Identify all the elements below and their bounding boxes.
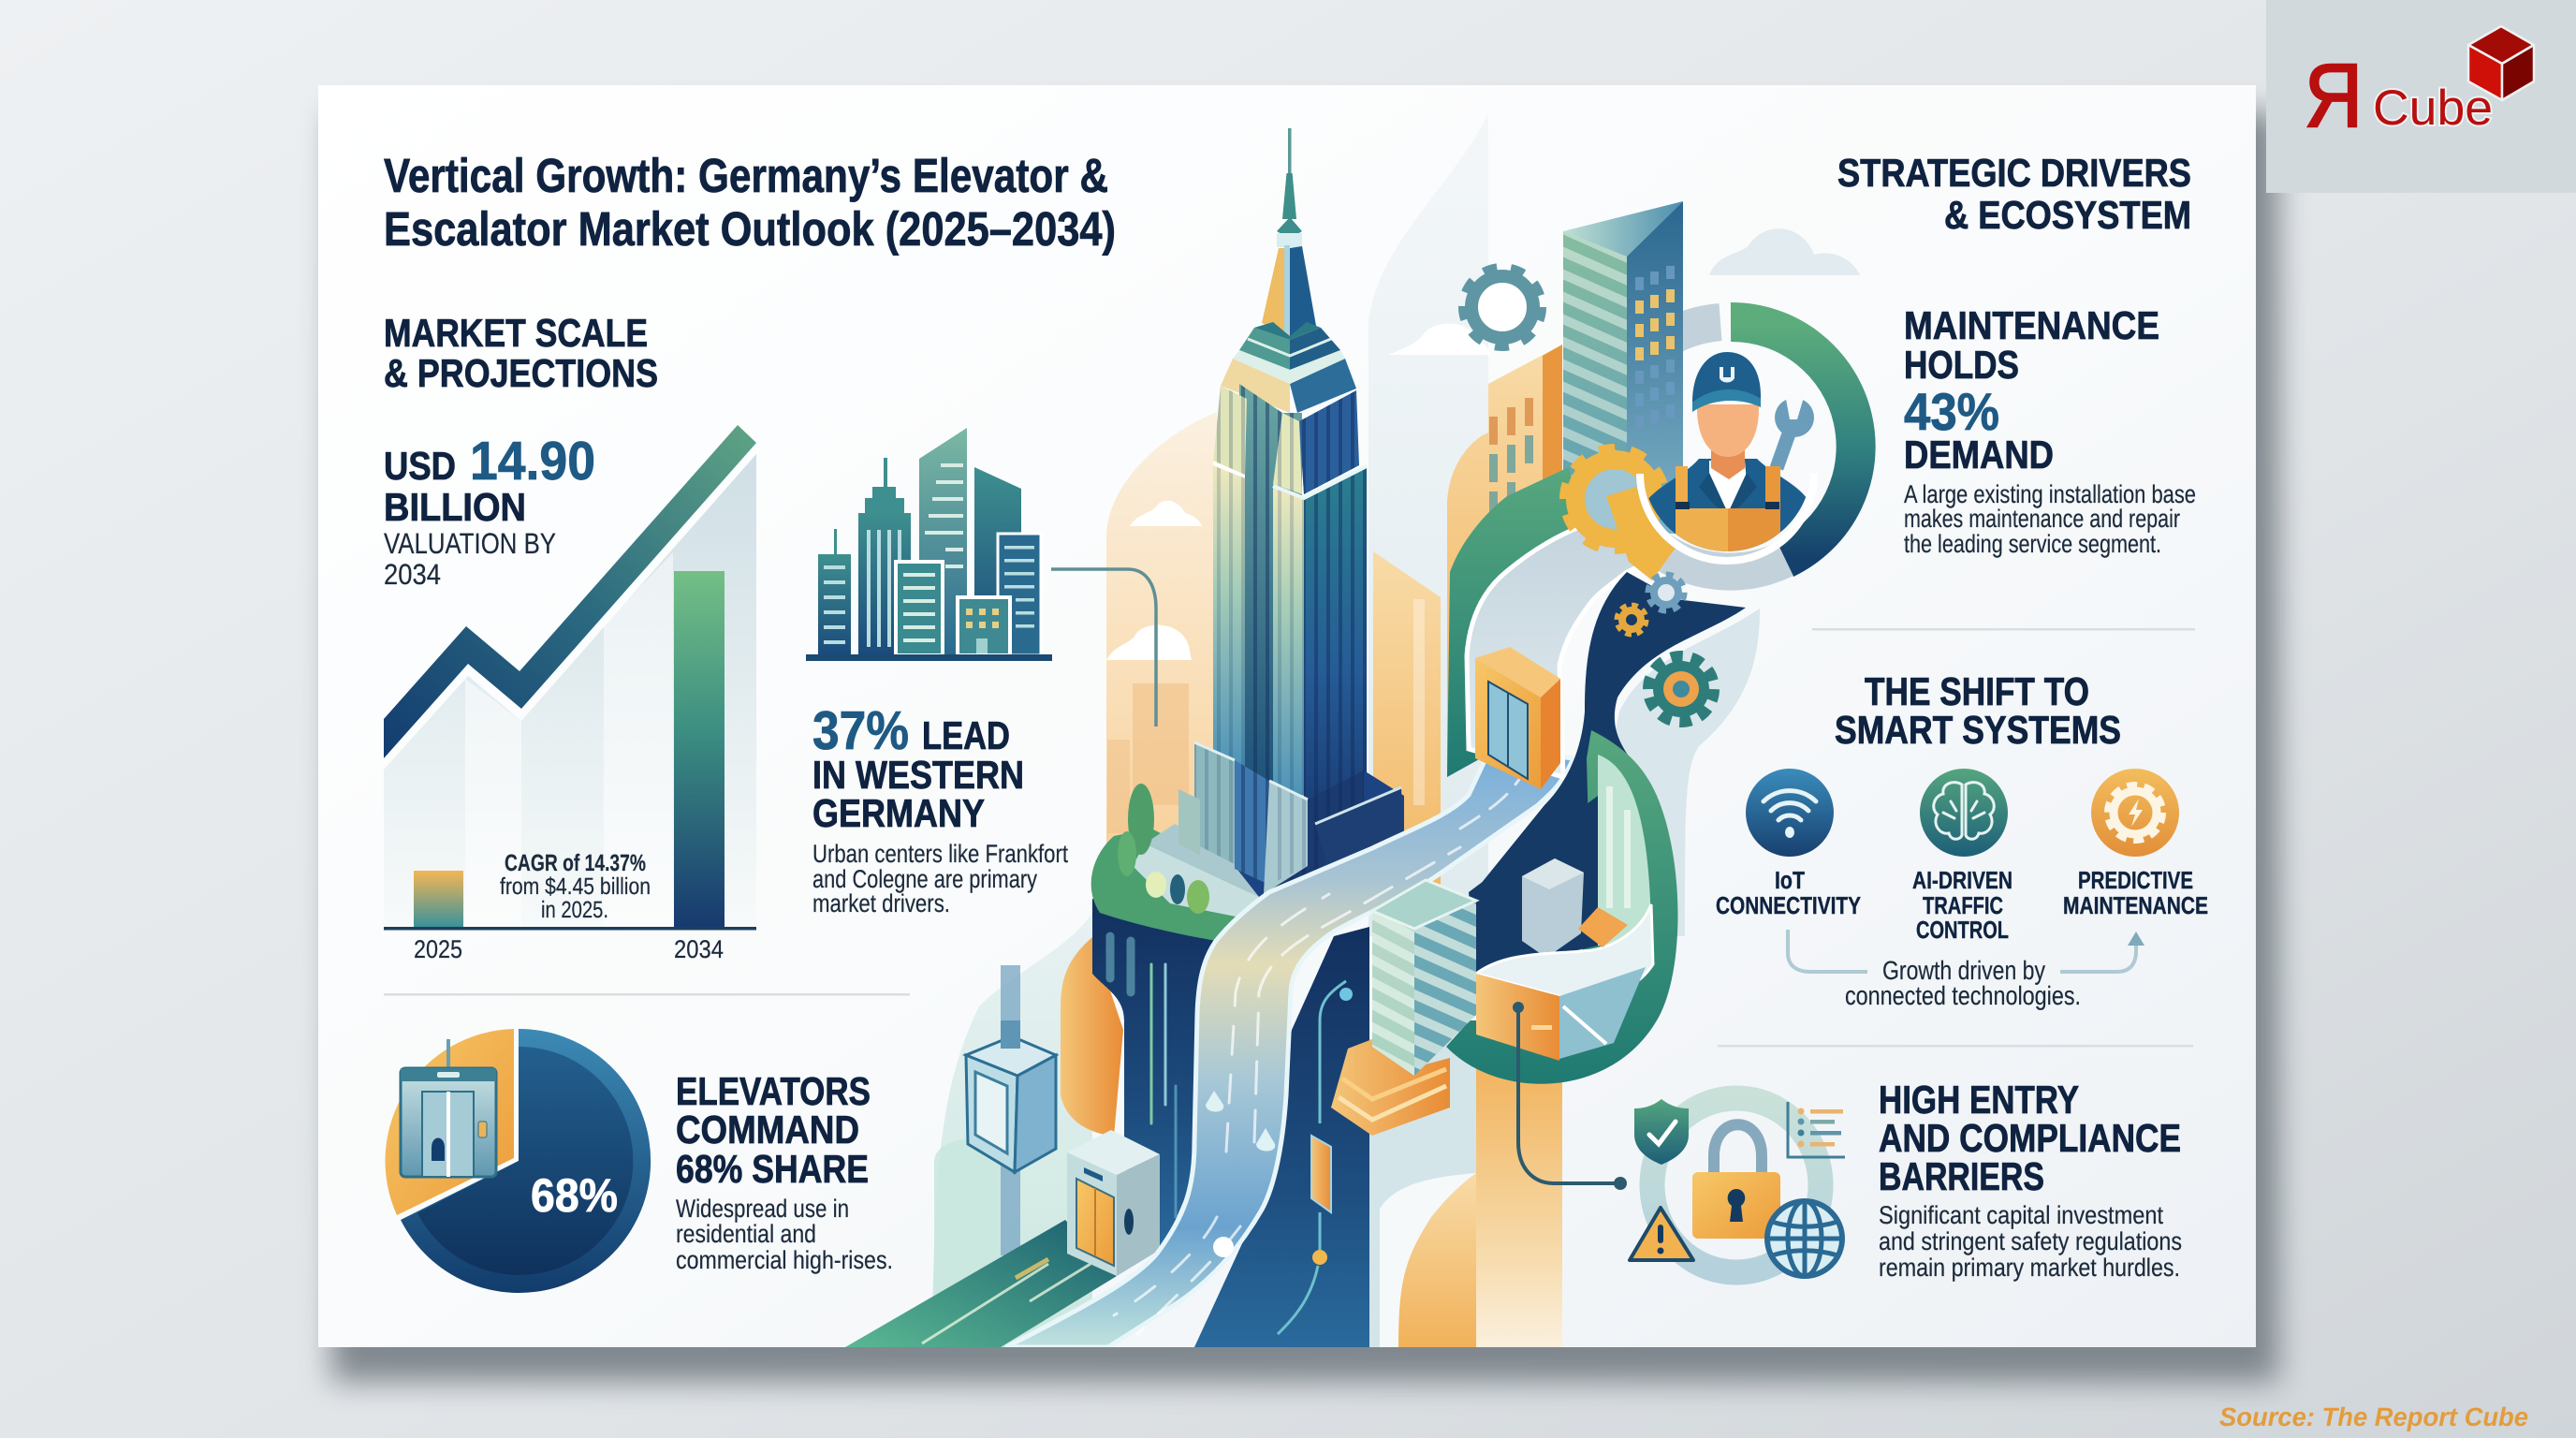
wrench <box>1775 394 1814 468</box>
gold column <box>1061 937 1123 1137</box>
heading: market scale <box>384 311 658 395</box>
pie chart <box>385 1029 651 1293</box>
stat: elevators share: residential and <box>676 1220 816 1248</box>
stat: western Germany: market drivers. <box>812 889 950 917</box>
stat: elevators share: COMMAND <box>676 1108 859 1152</box>
gold slice <box>385 1029 514 1215</box>
green garden rim and platform <box>1091 784 1260 940</box>
stat: barriers: remain primary market hurdles. <box>1879 1254 2180 1282</box>
growth note: Growth driven by <box>1882 956 2045 985</box>
ring lower grey arc <box>1657 548 1785 572</box>
growth chart <box>384 425 756 963</box>
heading: smart systems <box>1835 669 2121 752</box>
round platform <box>1469 796 1653 1061</box>
CAGR note: from $4.45 billion <box>500 873 651 900</box>
green ring around platform <box>1446 730 1677 1084</box>
bar 2034 <box>674 571 724 928</box>
upper blocks <box>1213 386 1359 494</box>
skyscraper <box>1213 128 1367 805</box>
icon: AI brain <box>1920 769 2008 857</box>
white ring under body <box>1640 474 1814 561</box>
title <box>384 149 1116 256</box>
stat: elevators share: 68% SHARE <box>676 1147 869 1191</box>
pale arch left <box>934 1138 1001 1249</box>
logo cube <box>2468 26 2534 100</box>
axis labels: 2025 <box>414 935 462 963</box>
heading: strategic drivers: STRATEGIC DRIVERS <box>1837 151 2191 195</box>
smart system labels: MAINTENANCE <box>2063 891 2208 919</box>
stat: maintenance: A large existing installation base <box>1904 480 2196 508</box>
stat: barriers: BARRIERS <box>1879 1154 2044 1198</box>
icon: compliance lock <box>1630 1098 1845 1276</box>
warning triangle <box>1630 1208 1693 1260</box>
inner green panel <box>1598 755 1651 946</box>
stat: western Germany: 37% <box>812 700 909 761</box>
pie label: 68% <box>531 1169 618 1222</box>
heading: strategic drivers: & ECOSYSTEM <box>1944 193 2191 237</box>
gear: green lower <box>1650 658 1712 720</box>
valuation figure: 2034 <box>384 558 441 591</box>
title: Escalator Market Outlook (2025–2034) <box>384 202 1116 256</box>
glass elevator cube <box>966 1020 1056 1172</box>
valuation figure: 14.90 <box>470 431 595 492</box>
CAGR note: in 2025. <box>541 897 608 923</box>
smart system labels: PREDICTIVE <box>2078 866 2193 894</box>
ring <box>1652 1098 1821 1272</box>
road lane markings <box>1114 758 1530 1334</box>
navy column under platform <box>1092 899 1217 1255</box>
central illustration <box>845 112 1860 1347</box>
valuation figure: USD <box>384 444 456 488</box>
head and cap <box>1692 352 1761 479</box>
stat: maintenance: the leading service segment. <box>1904 530 2161 558</box>
stat: barriers: HIGH ENTRY <box>1879 1078 2079 1122</box>
pale right zone and gold shape <box>1369 1039 1562 1347</box>
icon: wifi <box>1746 769 1834 857</box>
main sweeping road <box>1006 749 1573 1347</box>
smart system labels: IoT <box>1775 866 1805 894</box>
stat: western Germany: and Colegne are primary <box>812 865 1037 893</box>
smart system labels <box>1716 866 2208 944</box>
source note: Source: The Report Cube <box>2219 1402 2528 1431</box>
heading: smart systems: THE SHIFT TO <box>1865 669 2089 713</box>
orange building background <box>1447 345 1562 777</box>
CAGR note <box>500 850 651 923</box>
smart system labels: CONNECTIVITY <box>1716 891 1861 919</box>
heading: smart systems: SMART SYSTEMS <box>1835 708 2121 752</box>
clouds <box>1106 228 1860 660</box>
stat: maintenance: 43% <box>1904 382 1999 441</box>
body in circle <box>1643 459 1811 565</box>
icon: predictive gear <box>2091 769 2179 857</box>
bar 2025 <box>414 871 463 928</box>
logo wordmark <box>2305 46 2493 146</box>
elevator shaft pole <box>1001 965 1020 1255</box>
stat: maintenance: makes maintenance and repair <box>1904 505 2180 533</box>
striped tower <box>1372 880 1476 1076</box>
stat: barriers <box>1879 1078 2182 1282</box>
shield <box>1634 1099 1689 1165</box>
stat: barriers: and stringent safety regulations <box>1879 1227 2182 1255</box>
valuation figure: VALUATION BY <box>384 527 556 560</box>
trees <box>1118 784 1209 914</box>
stat: maintenance: DEMAND <box>1904 433 2054 477</box>
connector to barriers <box>1513 1002 1627 1190</box>
upper road and green wrap <box>1447 467 1670 777</box>
road arrows and dots <box>1206 1091 1275 1257</box>
column details <box>1110 936 1176 1217</box>
stat: barriers: Significant capital investment <box>1879 1201 2163 1229</box>
green road <box>845 1220 1117 1347</box>
stat: western Germany: IN WESTERN <box>812 753 1024 797</box>
valuation figure <box>384 431 595 591</box>
globe <box>1767 1201 1842 1276</box>
title: Vertical Growth: Germany’s Elevator & <box>384 149 1108 202</box>
logo wordmark: Я <box>2305 46 2363 146</box>
icon: city skyline <box>806 428 1052 661</box>
shackle <box>1714 1124 1762 1175</box>
stat: western Germany: LEAD <box>922 713 1010 757</box>
lock body <box>1692 1172 1780 1239</box>
heading: strategic drivers <box>1837 151 2191 237</box>
main white panel <box>318 85 2256 1347</box>
chart area <box>384 454 756 929</box>
tower base setbacks <box>1178 742 1404 897</box>
logo box <box>2266 0 2576 193</box>
stat: western Germany <box>812 700 1068 917</box>
gear: upper teal <box>1468 272 1537 342</box>
checklist <box>1788 1102 1845 1157</box>
stat: maintenance: MAINTENANCE <box>1904 303 2159 347</box>
gold stacked base <box>1331 1039 1450 1136</box>
antenna and spire <box>1262 128 1316 336</box>
maintenance worker <box>1640 352 1814 565</box>
heading: market scale: & PROJECTIONS <box>384 351 658 395</box>
small glass sign <box>1311 1136 1331 1212</box>
gold gear large <box>1567 451 1676 580</box>
maintenance ring chart <box>1647 322 1856 559</box>
crown tiers <box>1221 322 1356 413</box>
CAGR note: CAGR of 14.37% <box>505 850 646 876</box>
stat: elevators share: ELEVATORS <box>676 1069 871 1113</box>
connector: city to tower <box>1051 569 1156 726</box>
smart system labels: CONTROL <box>1916 916 2009 944</box>
lower shaft faces <box>1213 461 1367 805</box>
heading: market scale: MARKET SCALE <box>384 311 648 355</box>
smart system labels: AI-DRIVEN <box>1912 866 2012 894</box>
axis labels <box>414 935 724 963</box>
stat: elevators share: commercial high-rises. <box>676 1246 893 1274</box>
gear: small blue <box>1650 577 1682 609</box>
valuation figure: BILLION <box>384 485 526 529</box>
stat: elevators share <box>676 1069 893 1274</box>
navy ribbon <box>1469 572 1746 936</box>
stat: maintenance: HOLDS <box>1904 343 2019 387</box>
stat: western Germany: GERMANY <box>812 791 985 835</box>
stat: maintenance <box>1904 303 2196 558</box>
navy path details <box>1278 981 1353 1334</box>
panel shadow <box>331 112 2278 1382</box>
tall glass building <box>1563 201 1683 534</box>
inner dark slice <box>417 1047 633 1275</box>
axis <box>384 927 756 931</box>
pale blob right <box>1591 609 1760 936</box>
stat: barriers: AND COMPLIANCE <box>1879 1116 2181 1160</box>
gold elevator box on road <box>1475 647 1560 789</box>
logo wordmark: Cube <box>2373 81 2493 136</box>
blue slice <box>401 1029 651 1293</box>
stat: elevators share: Widespread use in <box>676 1195 849 1223</box>
growth note: connected technologies. <box>1845 981 2081 1010</box>
pale blob left <box>931 913 1092 1347</box>
recessed shaft <box>1239 384 1302 796</box>
navy lower path <box>1194 927 1369 1347</box>
growth note <box>1845 956 2081 1010</box>
gear: small gold <box>1618 607 1645 633</box>
arrow: growth loop <box>1788 930 2144 972</box>
pale backdrop shapes <box>1106 112 1488 946</box>
icon: elevator <box>401 1039 496 1177</box>
dividers <box>384 628 2195 1047</box>
axis labels: 2034 <box>674 935 724 963</box>
stat: western Germany: Urban centers like Frankfort <box>812 840 1068 868</box>
white elevator box <box>1067 1130 1160 1276</box>
smart system labels: TRAFFIC <box>1923 891 2003 919</box>
growth arrow <box>384 425 756 758</box>
